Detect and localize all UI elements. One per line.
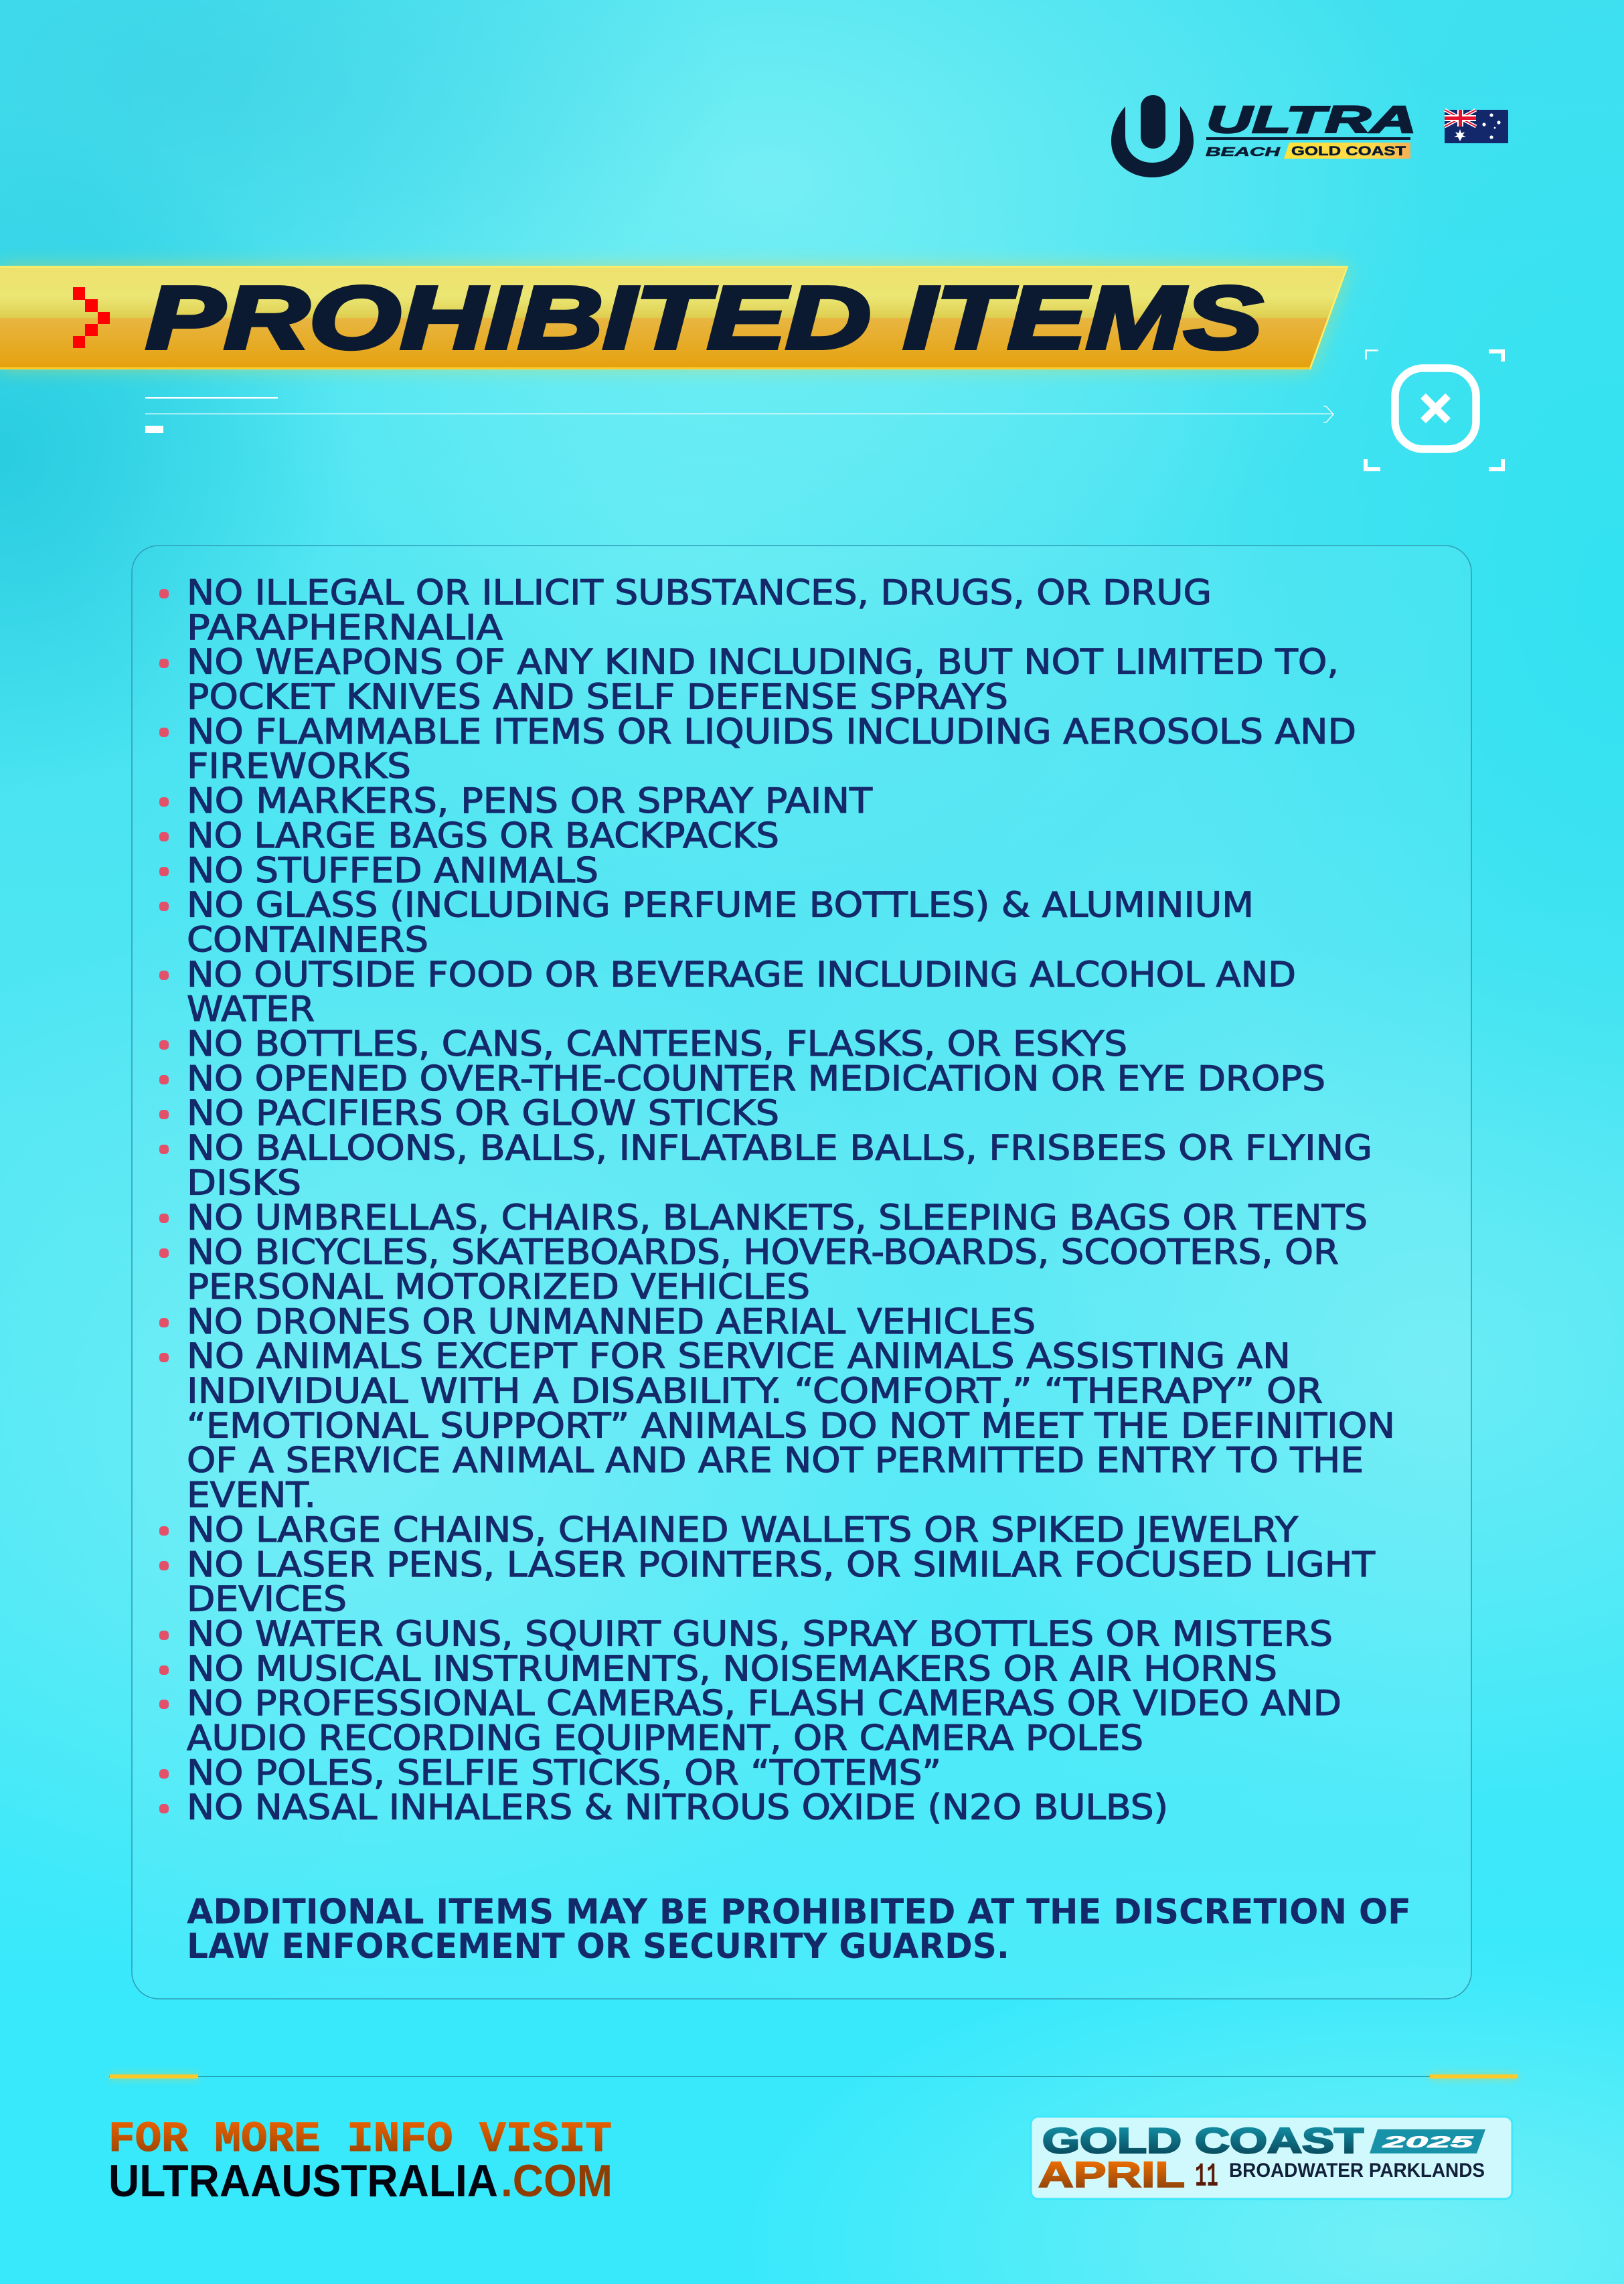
- logo wordmark: ULTRA: [1206, 98, 1416, 141]
- list item: weapons: POCKET KNIVES AND SELF DEFENSE SPRAYS: [187, 677, 1008, 718]
- list item: animals: OF A SERVICE ANIMAL AND ARE NOT PERMITTED ENTRY TO THE: [187, 1441, 1364, 1481]
- heading: PROHIBITED ITEMS: [146, 268, 1263, 367]
- day: 11: [1195, 2158, 1218, 2196]
- list item: illegal substances: [159, 573, 1212, 648]
- list item: laser pens: [159, 1545, 1375, 1620]
- list item: water guns: NO WATER GUNS, SQUIRT GUNS, SPRAY BOTTLES OR MISTERS: [187, 1615, 1333, 1655]
- panel: prohibited items list: [132, 546, 1471, 1999]
- venue: BROADWATER PARKLANDS: [1229, 2159, 1485, 2182]
- logo: Ultra Beach Gold Coast: [1111, 95, 1416, 177]
- list item: weapons: NO WEAPONS OF ANY KIND INCLUDING, BUT NOT LIMITED TO,: [187, 643, 1339, 683]
- list item: large bags: NO LARGE BAGS OR BACKPACKS: [187, 816, 779, 856]
- list item: animals: [159, 1337, 1395, 1516]
- list item: cameras: AUDIO RECORDING EQUIPMENT, OR CAMERA POLES: [187, 1718, 1143, 1759]
- list item: laser pens: NO LASER PENS, LASER POINTERS, OR SIMILAR FOCUSED LIGHT: [187, 1545, 1375, 1585]
- year badge: 2025: [1381, 2133, 1474, 2151]
- list item: balloons: NO BALLOONS, BALLS, INFLATABLE BALLS, FRISBEES OR FLYING: [187, 1129, 1372, 1169]
- closing note: ADDITIONAL ITEMS MAY BE PROHIBITED AT THE DISCRETION OF: [187, 1892, 1411, 1932]
- list item: outside food: WATER: [187, 989, 315, 1030]
- list item: flammable items: [159, 712, 1356, 787]
- more info label: FOR MORE INFO VISIT: [108, 2116, 612, 2164]
- month: APRIL: [1038, 2155, 1185, 2195]
- list item: bicycles: PERSONAL MOTORIZED VEHICLES: [187, 1267, 810, 1307]
- event details card: [1031, 2117, 1512, 2199]
- list item: musical instruments: NO MUSICAL INSTRUMENTS, NOISEMAKERS OR AIR HORNS: [187, 1649, 1277, 1689]
- list item: laser pens: DEVICES: [187, 1580, 347, 1620]
- title banner: [0, 266, 1349, 370]
- year badge: [1370, 2129, 1485, 2153]
- list item: outside food: NO OUTSIDE FOOD OR BEVERAGE INCLUDING ALCOHOL AND: [187, 955, 1296, 995]
- list item: markers: NO MARKERS, PENS OR SPRAY PAINT: [187, 781, 872, 821]
- list item: animals: EVENT.: [187, 1475, 316, 1516]
- list item: poles: NO POLES, SELFIE STICKS, OR “TOTEMS”: [187, 1753, 941, 1793]
- list item: pacifiers: NO PACIFIERS OR GLOW STICKS: [187, 1094, 779, 1134]
- footer rule with yellow accents: [109, 2074, 1518, 2078]
- list item: nasal inhalers: NO NASAL INHALERS & NITROUS OXIDE (N2O BULBS): [187, 1788, 1168, 1828]
- icon: Australian flag: [1445, 110, 1508, 143]
- icon: Ultra U mark: [1111, 95, 1194, 177]
- closing note: LAW ENFORCEMENT OR SECURITY GUARDS.: [187, 1927, 1009, 1967]
- list item: illegal substances: PARAPHERNALIA: [187, 608, 503, 648]
- list item: illegal substances: NO ILLEGAL OR ILLICIT SUBSTANCES, DRUGS, OR DRUG: [187, 573, 1212, 613]
- list item: flammable items: NO FLAMMABLE ITEMS OR LIQUIDS INCLUDING AEROSOLS AND: [187, 712, 1356, 752]
- list item: umbrellas: NO UMBRELLAS, CHAIRS, BLANKETS, SLEEPING BAGS OR TENTS: [187, 1198, 1368, 1238]
- footer: more info: [108, 2116, 613, 2206]
- list item: bottles: NO BOTTLES, CANS, CANTEENS, FLASKS, OR ESKYS: [187, 1024, 1127, 1064]
- closing note: [187, 1892, 1411, 1967]
- icon: prohibited X in rounded square: [1366, 351, 1503, 469]
- list item: balloons: DISKS: [187, 1163, 301, 1203]
- list item: chains: NO LARGE CHAINS, CHAINED WALLETS OR SPIKED JEWELRY: [187, 1510, 1298, 1550]
- list item: bicycles: NO BICYCLES, SKATEBOARDS, HOVER-BOARDS, SCOOTERS, OR: [187, 1232, 1339, 1273]
- list item: medication: NO OPENED OVER-THE-COUNTER MEDICATION OR EYE DROPS: [187, 1059, 1325, 1099]
- list item: bicycles: [159, 1232, 1339, 1307]
- logo sublabel: gold coast: GOLD COAST: [1291, 145, 1406, 159]
- list item: glass: [159, 886, 1254, 960]
- website url: .COM: [501, 2155, 613, 2206]
- arrow rule under title: [145, 397, 1333, 433]
- list item: weapons: [159, 643, 1339, 718]
- list item: outside food: [159, 955, 1296, 1030]
- list item: glass: CONTAINERS: [187, 920, 428, 960]
- list item: balloons: [159, 1129, 1372, 1203]
- location: GOLD COAST: [1042, 2121, 1364, 2161]
- list item: glass: NO GLASS (INCLUDING PERFUME BOTTLES) & ALUMINIUM: [187, 886, 1254, 926]
- list item: flammable items: FIREWORKS: [187, 746, 411, 787]
- list item: stuffed animals: NO STUFFED ANIMALS: [187, 851, 598, 891]
- icon: red pixel chevron: [73, 287, 110, 348]
- list item: animals: INDIVIDUAL WITH A DISABILITY. “COMFORT,” “THERAPY” OR: [187, 1371, 1323, 1411]
- list item: drones: NO DRONES OR UNMANNED AERIAL VEHICLES: [187, 1302, 1036, 1342]
- list item: cameras: [159, 1684, 1342, 1759]
- logo sublabel: beach: BEACH: [1206, 145, 1281, 159]
- list item: animals: NO ANIMALS EXCEPT FOR SERVICE ANIMALS ASSISTING AN: [187, 1337, 1291, 1377]
- website url: ULTRAAUSTRALIA: [108, 2155, 498, 2206]
- logo sublabel: gold coast: [1284, 143, 1410, 159]
- list item: cameras: NO PROFESSIONAL CAMERAS, FLASH CAMERAS OR VIDEO AND: [187, 1684, 1342, 1724]
- list item: animals: “EMOTIONAL SUPPORT” ANIMALS DO NOT MEET THE DEFINITION: [187, 1406, 1395, 1446]
